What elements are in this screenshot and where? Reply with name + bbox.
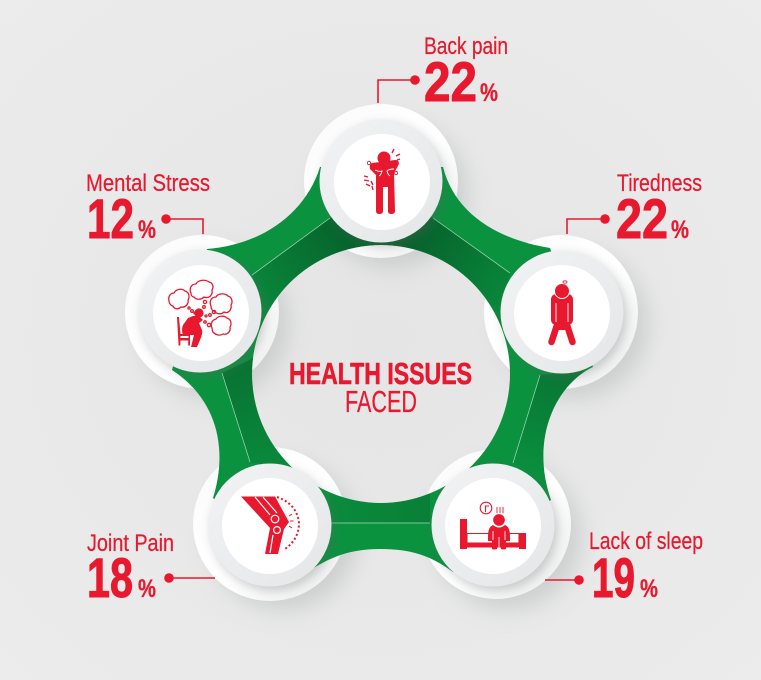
callout: mental stress: Mental Stress: [86, 170, 210, 197]
icon: tired person: [551, 281, 573, 342]
callout: joint pain: [87, 530, 215, 609]
callout: lack of sleep: Lack of sleep: [589, 528, 703, 555]
panel: back pain circle: [320, 120, 446, 247]
callout: joint pain: Joint Pain: [87, 530, 174, 557]
panel: mental stress circle: [138, 250, 265, 377]
icon: knee joint: [241, 496, 299, 554]
callout: back pain: %: [480, 79, 498, 107]
callout: lack of sleep: %: [640, 575, 658, 603]
callout: joint pain: 18: [87, 546, 133, 609]
callout: tiredness: [567, 170, 702, 250]
panel: lack of sleep circle: [432, 464, 558, 591]
centre title: [289, 356, 472, 419]
callout: lack of sleep: 19: [592, 546, 635, 609]
centre title: FACED: [345, 384, 417, 419]
callout: joint pain: %: [138, 575, 156, 603]
centre title: HEALTH ISSUES: [289, 356, 472, 391]
callout: mental stress: %: [138, 216, 156, 244]
panel: joint pain circle: [208, 464, 335, 591]
callout: tiredness: 22: [616, 187, 668, 250]
icon: person sitting on bed: [460, 502, 526, 550]
callout: tiredness: Tiredness: [617, 170, 702, 197]
outer white discs with soft shadows: [125, 104, 649, 611]
callout: back pain: 22: [424, 50, 477, 113]
icon: person with thought clouds: [169, 280, 232, 347]
callout: mental stress: [86, 170, 210, 250]
callout: mental stress: 12: [87, 187, 134, 250]
callout: lack of sleep: [545, 528, 703, 609]
panel: tiredness circle: [500, 250, 627, 378]
callout: back pain: Back pain: [424, 33, 508, 60]
callout: tiredness: %: [671, 216, 689, 244]
green pentagonal ring: [172, 167, 600, 575]
icon: person with back pain: [364, 149, 400, 214]
callout: back pain: [378, 33, 508, 113]
